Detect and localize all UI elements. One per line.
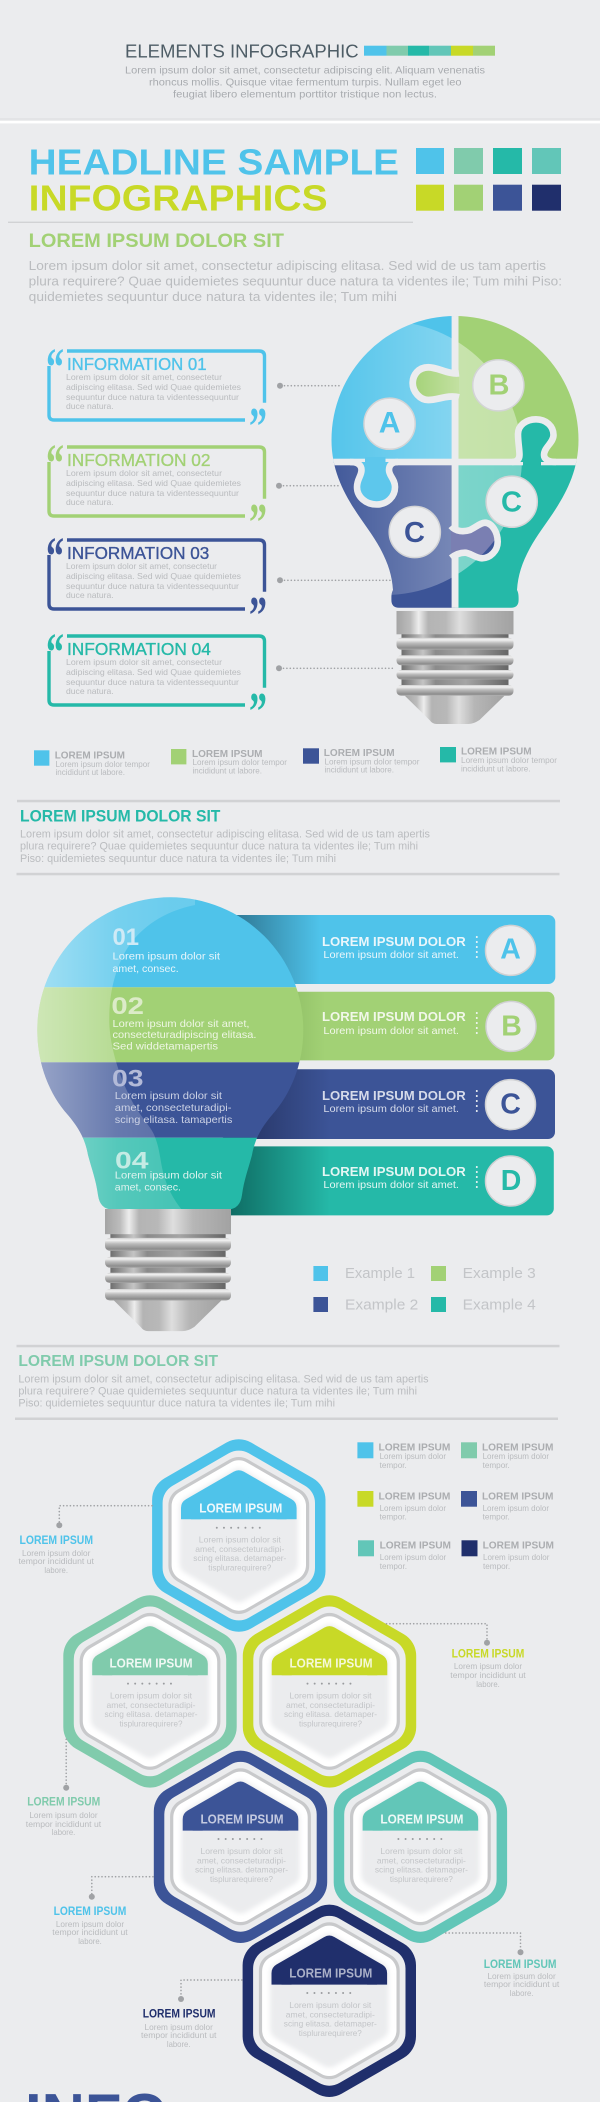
legend swatch teal xyxy=(358,1540,451,1571)
legend swatch dark navy xyxy=(462,1540,554,1571)
panel: information 04 xyxy=(46,622,267,741)
band 03 text: scing elitasa. tamapertis xyxy=(115,1114,232,1126)
callout: hexagon 1: tempor incididunt ut xyxy=(18,1556,95,1566)
hexagon 6 dark navy xyxy=(268,1930,391,2072)
panel: information 02: “ xyxy=(46,433,64,493)
hexagon 3 lime: LOREM IPSUM xyxy=(290,1656,372,1670)
bar D xyxy=(220,1146,554,1215)
hexagon 4 navy: tisplurarequirere? xyxy=(210,1874,273,1884)
hexagon 2 mint: Lorem ipsum dolor sit xyxy=(110,1691,193,1701)
panel: information 02: sequuntur duce natura ta videntessequuntur xyxy=(66,488,239,498)
panel: information 03: Lorem ipsum dolor sit amet, consectetur xyxy=(66,561,217,571)
main headline: HEADLINE SAMPLE xyxy=(29,141,399,182)
panel: information 04: sequuntur duce natura ta videntessequuntur xyxy=(66,677,239,687)
callout: hexagon 4 xyxy=(52,1877,153,1946)
hexagon 5 teal: Lorem ipsum dolor sit xyxy=(380,1846,463,1856)
bar B: Lorem ipsum dolor sit amet. xyxy=(323,1025,459,1037)
panel: information 02: duce natura. xyxy=(66,497,114,507)
section 1 paragraph: plura requirere? Quae quidemietes sequuntur duce natura ta videntes ile; Tum mihi Piso: xyxy=(29,273,562,288)
section 2 paragraph xyxy=(20,828,430,865)
bulb 2 metal socket xyxy=(105,1209,231,1331)
hexagon 4 navy: scing elitasa. detamaper- xyxy=(195,1864,288,1874)
puzzle light bulb xyxy=(330,314,580,610)
section 3 paragraph: plura requirere? Quae quidemietes sequuntur duce natura ta videntes ile; Tum mihi xyxy=(18,1386,417,1398)
legend item 3: incididunt ut labore. xyxy=(324,766,394,775)
callout: hexagon 6: tempor incididunt ut xyxy=(141,2030,217,2040)
legend swatch navy: tempor. xyxy=(483,1512,510,1521)
header description: Lorem ipsum dolor sit amet, consectetur adipiscing elit. Aliquam venenatis xyxy=(125,64,485,76)
hexagon 6 dark navy: tisplurarequirere? xyxy=(299,2028,362,2038)
hexagon 1 sky: scing elitasa. detamaper- xyxy=(193,1553,286,1563)
hexagon 4 navy: Lorem ipsum dolor sit xyxy=(200,1846,283,1856)
legend row xyxy=(34,746,557,777)
bulb puzzle pieces xyxy=(330,314,580,610)
panel: information 01: Lorem ipsum dolor sit amet, consectetur xyxy=(66,372,222,382)
legend item 1 xyxy=(34,750,150,777)
section 2 paragraph: Lorem ipsum dolor sit amet, consectetur adipiscing elitasa. Sed wid de us tam apertis xyxy=(20,828,430,840)
header title: ELEMENTS INFOGRAPHIC xyxy=(125,40,359,61)
bar B xyxy=(220,992,554,1060)
example legend: Example 2 xyxy=(345,1297,418,1314)
puzzle badge C teal: C xyxy=(501,486,522,518)
hexagon 2 mint: amet, consecteturadipi- xyxy=(106,1700,196,1710)
legend swatch lime xyxy=(357,1491,450,1521)
panel: information 01: ” xyxy=(249,396,267,456)
band 04 text: Lorem ipsum dolor sit xyxy=(115,1170,222,1182)
hexagon 3 lime: tisplurarequirere? xyxy=(299,1718,362,1728)
legend swatch dark navy: LOREM IPSUM xyxy=(483,1540,554,1551)
hexagon 3 lime xyxy=(268,1620,391,1763)
section 3 paragraph: Piso: quidemietes sequuntur duce natura ta videntes ile; Tum mihi xyxy=(18,1398,335,1410)
panel: information 02: Lorem ipsum dolor sit amet, consectetur xyxy=(66,468,222,478)
callout: hexagon 1: labore. xyxy=(44,1565,68,1575)
band 01 text xyxy=(112,924,220,975)
hexagon 5 teal: amet, consecteturadipi- xyxy=(377,1855,466,1865)
bar A: Lorem ipsum dolor sit amet. xyxy=(323,949,459,961)
puzzle badge C navy xyxy=(389,506,440,558)
legend swatch mint: tempor. xyxy=(483,1461,510,1470)
callout: hexagon 4: labore. xyxy=(78,1936,102,1946)
callout: hexagon 5: tempor incididunt ut xyxy=(484,1979,560,1989)
panel: information 04: INFORMATION 04 xyxy=(67,639,211,659)
section 3 heading: LOREM IPSUM DOLOR SIT xyxy=(18,1353,219,1370)
header description: rhoncus mollis. Quisque vitae fermentum turpis. Nullam eget leo xyxy=(149,76,462,88)
band 02 text: Sed widdetamapertis xyxy=(112,1041,218,1053)
bulb colour bands xyxy=(37,897,303,1209)
hexagon 2 mint: scing elitasa. detamaper- xyxy=(104,1709,198,1719)
callout: hexagon 2: tempor incididunt ut xyxy=(26,1819,102,1829)
panel: information 04: duce natura. xyxy=(66,686,114,696)
section 1 paragraph xyxy=(29,258,562,304)
band 04 text xyxy=(115,1148,222,1194)
panel: information 02: adipiscing elitasa. Sed wid Quae quidemietes xyxy=(66,478,241,488)
callout: hexagon 5: labore. xyxy=(510,1988,533,1998)
callout: hexagon 6: Lorem ipsum dolor xyxy=(145,2022,213,2032)
example legend: Example 4 xyxy=(463,1297,536,1314)
section 2 paragraph: Piso: quidemietes sequuntur duce natura ta videntes ile; Tum mihi xyxy=(20,853,336,865)
header description: feugiat libero elementum porttitor tristique non lectus. xyxy=(173,88,437,100)
hexagon colour legend xyxy=(357,1442,554,1571)
callout: hexagon 3 xyxy=(386,1624,526,1689)
callout: hexagon 1: LOREM IPSUM xyxy=(20,1535,93,1547)
hexagon 1 sky: Lorem ipsum dolor sit xyxy=(199,1535,281,1545)
legend swatch navy: Lorem ipsum dolor xyxy=(483,1504,549,1513)
hexagon 3 lime: scing elitasa. detamaper- xyxy=(284,1709,377,1719)
legend swatch navy: LOREM IPSUM xyxy=(482,1491,553,1502)
callout: hexagon 6: LOREM IPSUM xyxy=(143,2009,216,2021)
callout: hexagon 2: LOREM IPSUM xyxy=(27,1797,100,1809)
band 02 text: 02 xyxy=(111,993,144,1020)
legend swatch dark navy: tempor. xyxy=(483,1562,510,1571)
section 1 paragraph: quidemietes sequuntur duce natura ta videntes ile; Tum mihi xyxy=(29,289,397,304)
puzzle badge C navy: C xyxy=(404,517,425,549)
bar D: LOREM IPSUM DOLOR xyxy=(322,1165,466,1179)
legend item 1: Lorem ipsum dolor tempor xyxy=(56,760,150,769)
panel: information 01: sequuntur duce natura ta videntessequuntur xyxy=(66,392,239,402)
callout: hexagon 4: Lorem ipsum dolor xyxy=(56,1919,124,1929)
callout: hexagon 4: LOREM IPSUM xyxy=(54,1906,126,1918)
callout: hexagon 6 xyxy=(141,1980,242,2049)
legend swatch sky: Lorem ipsum dolor xyxy=(380,1452,446,1461)
panel: information 03 xyxy=(46,526,267,645)
callout: hexagon 5: Lorem ipsum dolor xyxy=(487,1971,556,1981)
hexagon 5 teal: tisplurarequirere? xyxy=(390,1874,453,1884)
panel: information 02 xyxy=(46,433,267,552)
callout: hexagon 5 xyxy=(446,1933,560,1998)
hexagon 6 dark navy: amet, consecteturadipi- xyxy=(286,2009,375,2019)
panel: information 03: adipiscing elitasa. Sed wid Quae quidemietes xyxy=(66,571,241,581)
bar C: LOREM IPSUM DOLOR xyxy=(322,1089,466,1103)
header description xyxy=(125,64,485,100)
panel: information 04: ” xyxy=(249,681,267,741)
puzzle badge B: B xyxy=(489,370,509,402)
puzzle badge C teal xyxy=(486,476,537,527)
band 03 text: 03 xyxy=(112,1065,144,1092)
hexagon 6 dark navy: Lorem ipsum dolor sit xyxy=(289,2000,372,2010)
legend swatch mint: LOREM IPSUM xyxy=(482,1442,553,1453)
callout: hexagon 2: labore. xyxy=(52,1827,75,1837)
bar B: LOREM IPSUM DOLOR xyxy=(322,1010,466,1024)
band 02 text xyxy=(111,993,256,1053)
hexagon 3 lime: amet, consecteturadipi- xyxy=(286,1700,375,1710)
section 3 paragraph: Lorem ipsum dolor sit amet, consectetur adipiscing elitasa. Sed wid de us tam apertis xyxy=(18,1374,429,1386)
section 2 paragraph: plura requirere? Quae quidemietes sequuntur duce natura ta videntes ile; Tum mihi xyxy=(20,841,418,853)
panel: information 01: duce natura. xyxy=(66,401,114,411)
legend swatch teal: tempor. xyxy=(380,1562,407,1571)
panel: information 02: INFORMATION 02 xyxy=(67,450,210,470)
panel: information 04: adipiscing elitasa. Sed wid Quae quidemietes xyxy=(66,667,241,677)
legend item 1: incididunt ut labore. xyxy=(56,768,125,777)
legend item 1: LOREM IPSUM xyxy=(55,750,125,761)
band 01 text: 01 xyxy=(112,924,139,951)
callout: hexagon 4: tempor incididunt ut xyxy=(52,1927,128,1937)
hexagon 6 dark navy: LOREM IPSUM xyxy=(289,1966,372,1980)
band 01 text: Lorem ipsum dolor sit xyxy=(112,951,220,963)
banded light bulb xyxy=(37,897,303,1209)
legend swatch teal: LOREM IPSUM xyxy=(380,1540,451,1551)
example legend: Example 3 xyxy=(463,1265,536,1282)
callout: hexagon 1: Lorem ipsum dolor xyxy=(22,1548,91,1558)
hexagon 2 mint xyxy=(88,1620,212,1763)
top header xyxy=(125,40,495,100)
legend item 2: LOREM IPSUM xyxy=(192,749,262,760)
hexagon 4 navy: LOREM IPSUM xyxy=(200,1812,284,1826)
hexagon 1 sky: LOREM IPSUM xyxy=(199,1502,282,1516)
section 1 heading: LOREM IPSUM DOLOR SIT xyxy=(29,231,284,252)
bulb 1 metal socket xyxy=(396,611,514,724)
example legend xyxy=(313,1265,536,1314)
white divider band xyxy=(0,118,600,123)
bar C: Lorem ipsum dolor sit amet. xyxy=(323,1103,459,1115)
bar A: A xyxy=(500,934,521,966)
legend item 2: incididunt ut labore. xyxy=(192,767,262,776)
hexagon 5 teal: LOREM IPSUM xyxy=(380,1812,463,1826)
band 01 text: amet, consec. xyxy=(112,963,179,975)
legend swatch teal: Lorem ipsum dolor xyxy=(380,1553,447,1562)
legend swatch lime: Lorem ipsum dolor xyxy=(380,1504,446,1513)
legend swatch lime: LOREM IPSUM xyxy=(378,1491,450,1502)
callout: hexagon 2 xyxy=(26,1739,102,1837)
dotted connectors from information panels to bulb xyxy=(276,383,394,671)
callout: hexagon 3: Lorem ipsum dolor xyxy=(454,1661,522,1671)
band 04 text: 04 xyxy=(115,1148,149,1175)
panel: information 04: “ xyxy=(46,622,64,682)
panel: information 02: ” xyxy=(249,492,267,552)
hexagon 1 sky: tisplurarequirere? xyxy=(208,1562,272,1572)
hexagon 3 lime: Lorem ipsum dolor sit xyxy=(289,1691,372,1701)
main headline xyxy=(29,141,399,218)
bar B: B xyxy=(501,1011,522,1043)
bar D: D xyxy=(501,1165,521,1197)
legend item 2: Lorem ipsum dolor tempor xyxy=(192,758,287,767)
legend item 4: incididunt ut labore. xyxy=(461,765,530,774)
hexagon 2 mint: LOREM IPSUM xyxy=(110,1656,192,1670)
band 04 text: amet, consec. xyxy=(115,1182,181,1194)
hexagon 5 teal xyxy=(359,1776,482,1918)
band 03 text: amet, consecteturadipi- xyxy=(115,1102,232,1114)
panel: information 03: sequuntur duce natura ta videntessequuntur xyxy=(66,581,239,591)
legend swatch sky xyxy=(357,1442,450,1470)
callout: hexagon 6: labore. xyxy=(167,2039,190,2049)
example legend: Example 1 xyxy=(345,1265,415,1282)
hexagon 1 sky xyxy=(177,1464,300,1607)
band 02 text: consecteturadipiscing elitasa. xyxy=(112,1029,256,1041)
band 03 text: Lorem ipsum dolor sit xyxy=(115,1090,222,1102)
legend swatch sky: tempor. xyxy=(380,1461,407,1470)
panel: information 03: INFORMATION 03 xyxy=(67,543,209,563)
section 2 heading: LOREM IPSUM DOLOR SIT xyxy=(20,807,220,825)
callout: hexagon 2: Lorem ipsum dolor xyxy=(29,1810,98,1820)
band 02 text: Lorem ipsum dolor sit amet, xyxy=(112,1018,250,1030)
header colour strip xyxy=(364,46,495,56)
band 03 text xyxy=(112,1065,232,1126)
panel: information 03: “ xyxy=(46,526,64,586)
callout: hexagon 3: labore. xyxy=(476,1679,500,1689)
legend swatch mint: Lorem ipsum dolor xyxy=(483,1452,549,1461)
panel: information 01: adipiscing elitasa. Sed wid Quae quidemietes xyxy=(66,382,241,392)
legend item 2 xyxy=(171,749,287,776)
headline colour swatches xyxy=(416,148,561,211)
section 1 paragraph: Lorem ipsum dolor sit amet, consectetur adipiscing elitasa. Sed wid de us tam apertis xyxy=(29,258,547,273)
puzzle badge B xyxy=(473,360,524,411)
callout: hexagon 3: LOREM IPSUM xyxy=(452,1649,524,1661)
legend swatch navy xyxy=(461,1491,553,1521)
callout: hexagon 1 xyxy=(18,1506,152,1575)
panel: information 04: Lorem ipsum dolor sit amet, consectetur xyxy=(66,657,222,667)
panel: information 01: “ xyxy=(46,337,64,397)
panel: information 03: duce natura. xyxy=(66,590,114,600)
legend swatch mint xyxy=(461,1442,553,1470)
hexagon 6 dark navy: scing elitasa. detamaper- xyxy=(284,2018,377,2028)
bar C: C xyxy=(500,1088,521,1120)
hexagon 2 mint: tisplurarequirere? xyxy=(120,1718,183,1728)
legend item 4: LOREM IPSUM xyxy=(461,746,532,758)
legend swatch dark navy: Lorem ipsum dolor xyxy=(483,1553,550,1562)
main headline: INFOGRAPHICS xyxy=(29,177,328,218)
panel: information 01: INFORMATION 01 xyxy=(67,354,207,374)
section 3 paragraph xyxy=(18,1374,429,1410)
bar A: LOREM IPSUM DOLOR xyxy=(322,935,466,949)
legend item 3 xyxy=(303,748,420,775)
legend swatch lime: tempor. xyxy=(380,1512,407,1521)
hexagon 5 teal: scing elitasa. detamaper- xyxy=(375,1864,468,1874)
bar D: Lorem ipsum dolor sit amet. xyxy=(323,1179,459,1191)
legend swatch sky: LOREM IPSUM xyxy=(378,1442,450,1453)
legend item 4 xyxy=(440,746,557,774)
bar C xyxy=(220,1069,555,1139)
panel: information 01 xyxy=(46,337,267,456)
hexagon 4 navy: amet, consecteturadipi- xyxy=(197,1855,286,1865)
puzzle badge A xyxy=(364,398,415,449)
callout: hexagon 5: LOREM IPSUM xyxy=(484,1959,556,1971)
panel: information 03: ” xyxy=(249,585,267,645)
legend item 3: LOREM IPSUM xyxy=(324,748,395,759)
bar A xyxy=(220,915,555,984)
puzzle badge A: A xyxy=(379,406,400,439)
callout: hexagon 3: tempor incididunt ut xyxy=(450,1670,526,1680)
legend item 3: Lorem ipsum dolor tempor xyxy=(324,757,420,766)
hexagon 4 navy xyxy=(179,1776,302,1918)
legend item 4: Lorem ipsum dolor tempor xyxy=(461,756,557,765)
hexagon 1 sky: amet, consecteturadipi- xyxy=(195,1544,284,1554)
